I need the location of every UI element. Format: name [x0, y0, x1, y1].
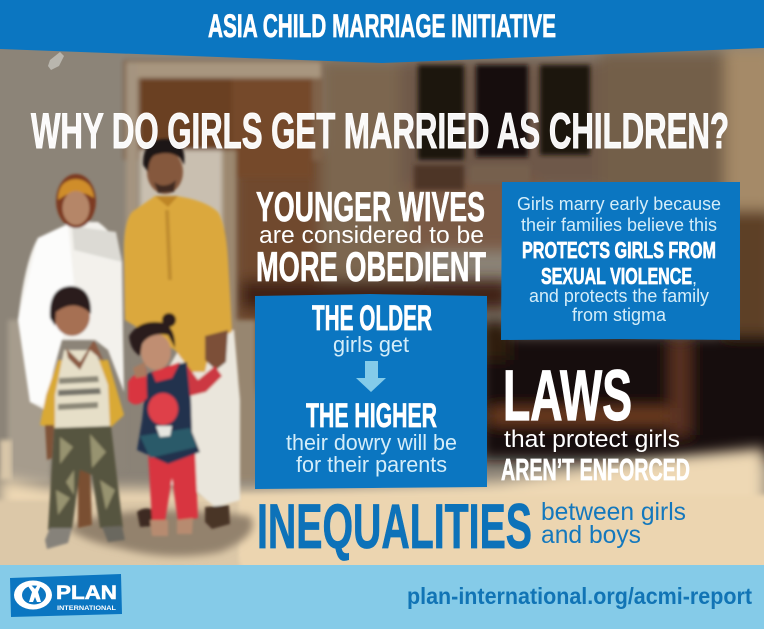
woman in white shawl and headscarf [18, 174, 124, 410]
text block: younger wives [256, 183, 486, 290]
panel: protects girls from sexual violence: , [692, 268, 697, 288]
boy in cream shirt and camouflage trousers [40, 286, 125, 549]
panel: the older girls get: their dowry will be [286, 430, 457, 455]
panel: the older girls get: girls get [333, 332, 409, 357]
text block: inequalities: INEQUALITIES [257, 492, 532, 562]
panel: protects girls from sexual violence: their families believe this [521, 214, 717, 235]
footer band [0, 565, 764, 629]
header band [0, 0, 764, 63]
logo: Plan International [10, 574, 122, 617]
text block: laws not enforced: LAWS [503, 357, 632, 436]
panel: protects girls from sexual violence [501, 182, 740, 340]
panel: the older girls get: for their parents [296, 452, 447, 477]
photo: family standing in front of the house [18, 139, 240, 549]
panel: protects girls from sexual violence: SEXUAL VIOLENCE [541, 263, 692, 289]
header title: ASIA CHILD MARRIAGE INITIATIVE [208, 8, 556, 44]
text block: younger wives: are considered to be [259, 222, 484, 249]
panel: protects girls from sexual violence: and protects the family [529, 286, 709, 306]
little girl in red and navy dress [128, 313, 222, 536]
text block: younger wives: MORE OBEDIENT [256, 243, 486, 290]
logo: Plan International: PLAN [56, 583, 117, 604]
panel: protects girls from sexual violence: from stigma [572, 305, 667, 325]
text block: inequalities: between girls [541, 498, 686, 526]
man in yellow shirt [124, 139, 240, 529]
panel: protects girls from sexual violence: Girls marry early because [517, 193, 721, 214]
text block: laws not enforced [501, 357, 690, 487]
arrow: down [356, 361, 386, 392]
text block: younger wives: YOUNGER WIVES [256, 183, 485, 230]
text block: laws not enforced: that protect girls [504, 426, 680, 453]
text block: inequalities: and boys [541, 521, 641, 549]
logo: Plan International: INTERNATIONAL [57, 605, 116, 612]
panel: the older girls get: THE HIGHER [306, 397, 437, 435]
panel: the older girls get [255, 294, 487, 489]
panel: the older girls get: THE OLDER [312, 299, 432, 338]
